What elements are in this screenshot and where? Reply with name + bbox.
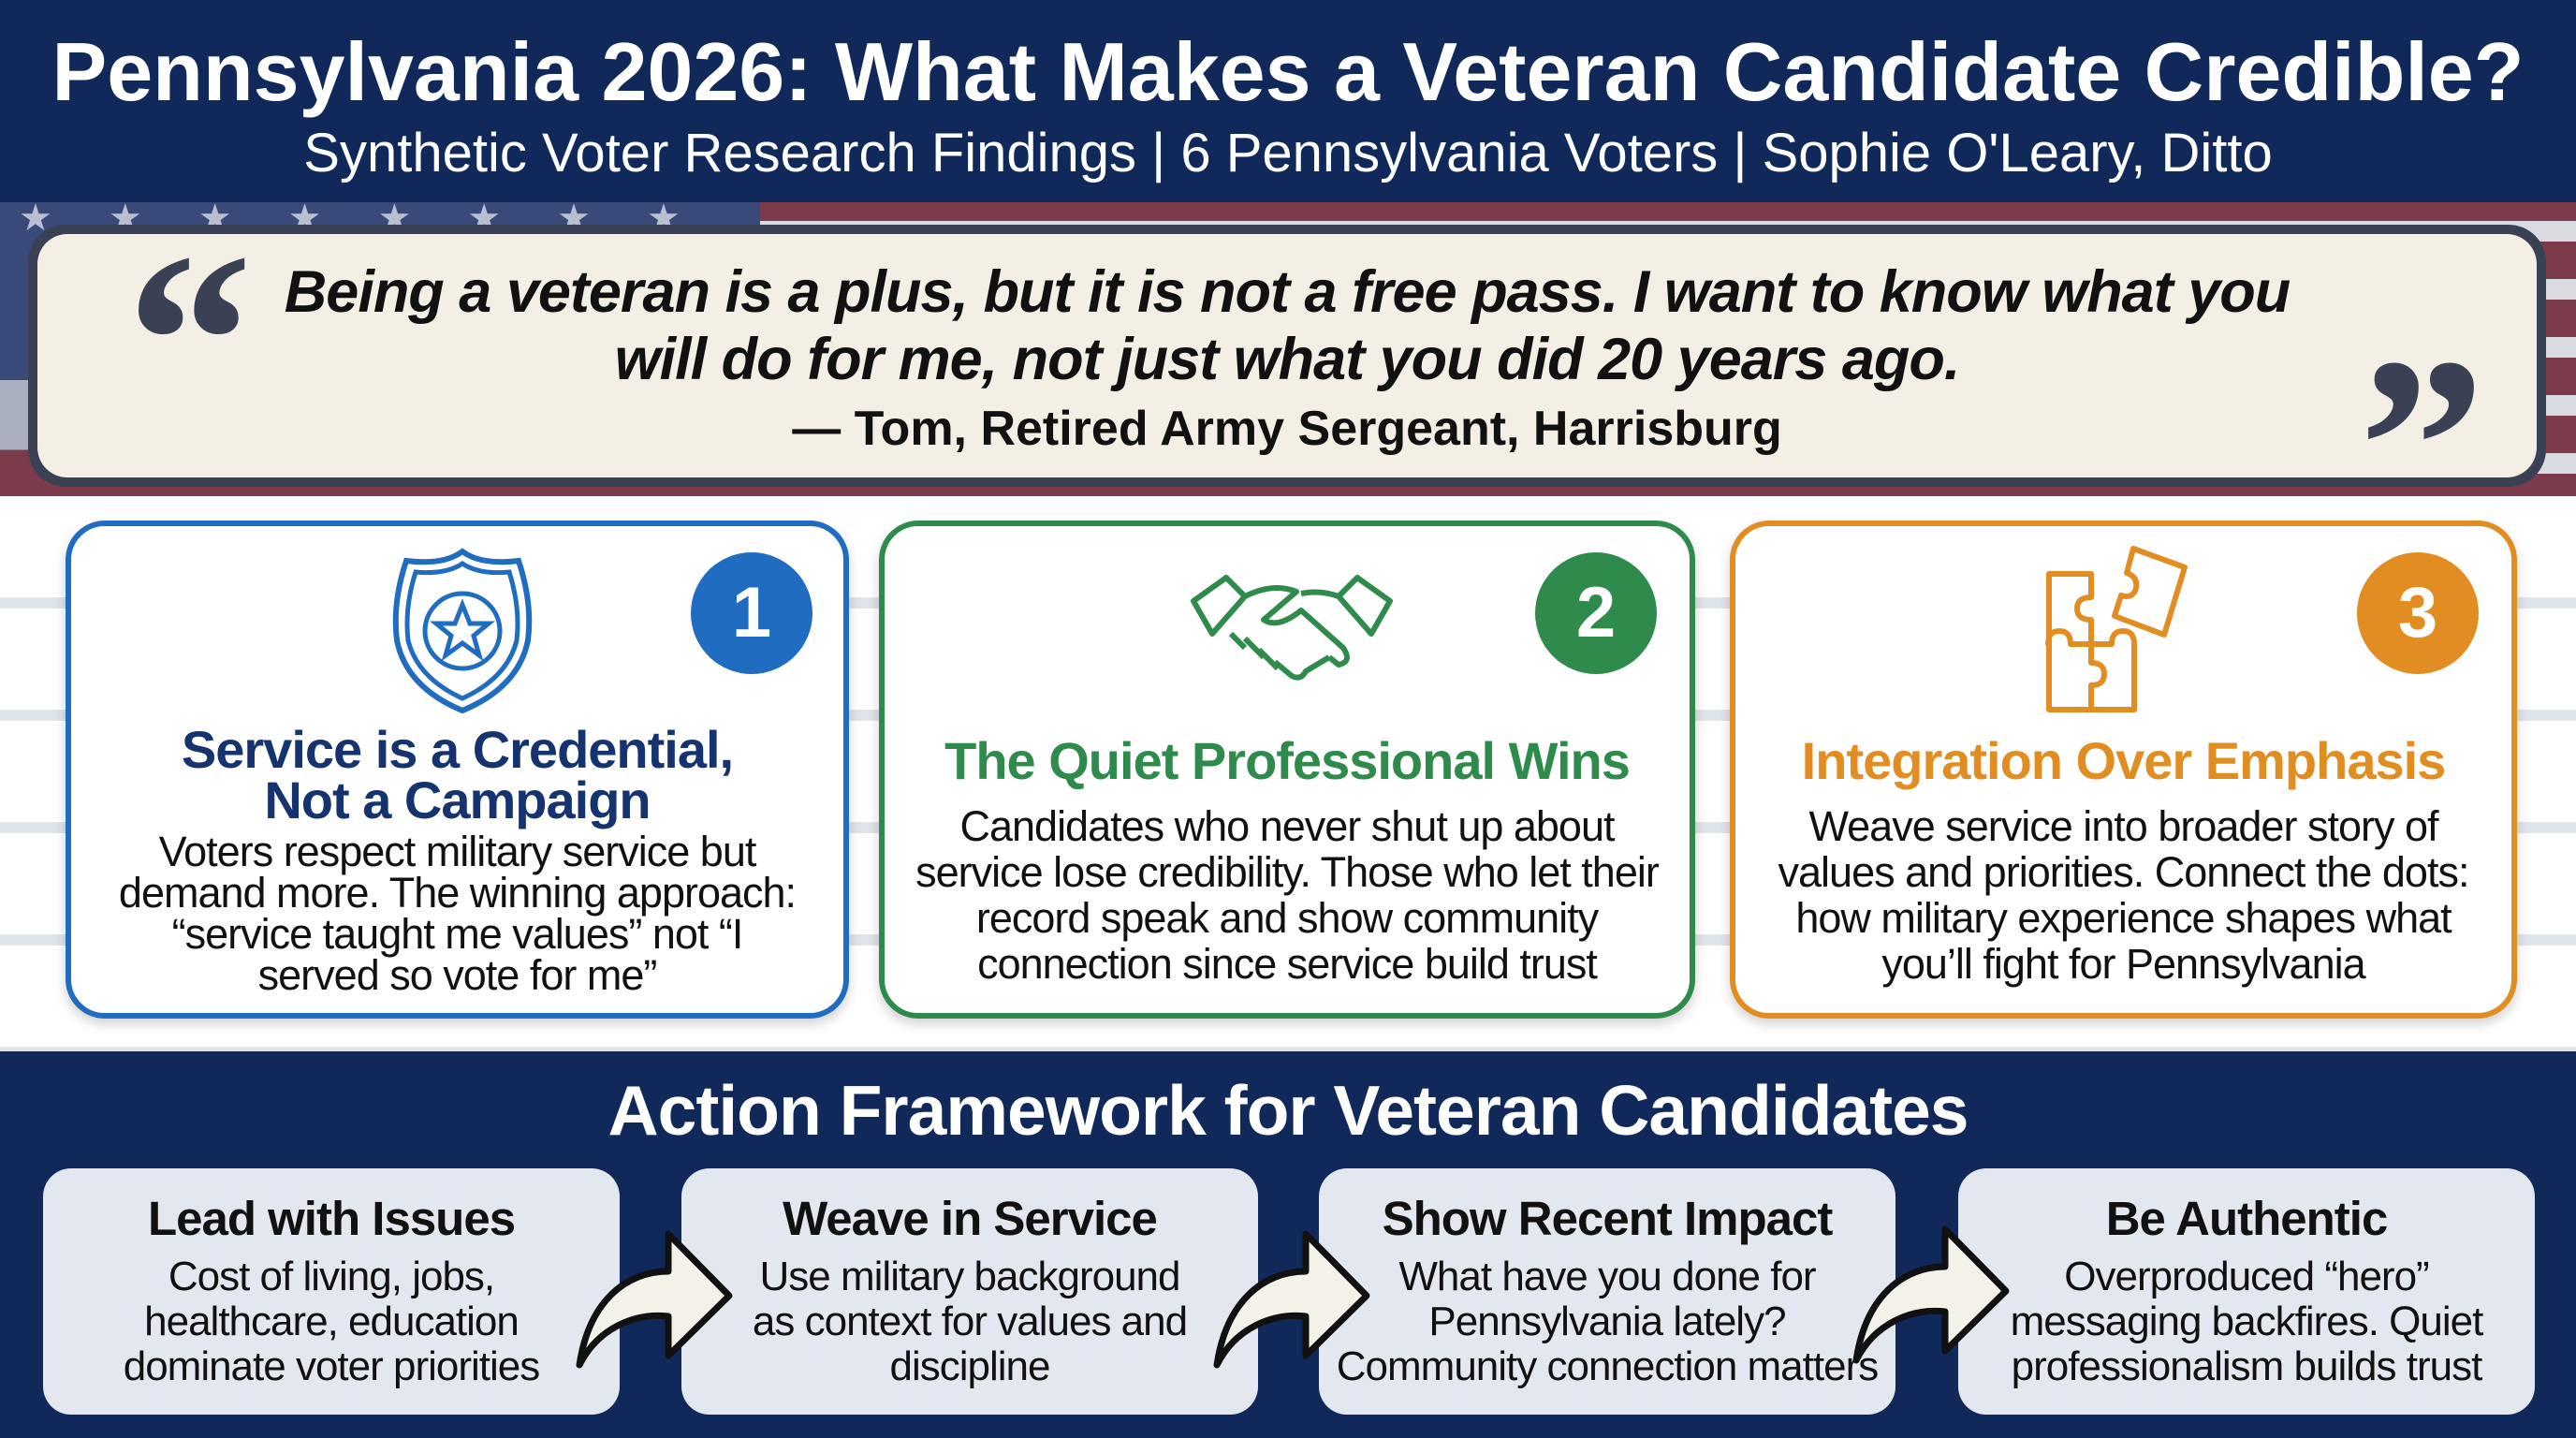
step 1 [43, 1168, 620, 1415]
step 4 [1958, 1168, 2535, 1415]
step 1: dominate voter priorities [124, 1343, 539, 1389]
card body 2: Candidates who never shut up about [959, 802, 1614, 850]
number badge 2 [1535, 552, 1657, 674]
step 1: Cost of living, jobs, [168, 1254, 494, 1299]
step 4: Overproduced “hero” [2064, 1254, 2429, 1299]
quote box [28, 225, 2546, 487]
header [0, 0, 2576, 202]
card title 1: Not a Campaign [264, 770, 651, 829]
quote text: will do for me, not just what you did 20 years ago. [615, 327, 1959, 392]
icon: handshake [1191, 575, 1393, 681]
arrow 3 [1853, 1226, 2009, 1363]
step 3: Show Recent Impact [1383, 1192, 1832, 1245]
card title 3: Integration Over Emphasis [1802, 731, 2445, 790]
card title 1: Service is a Credential, [182, 720, 733, 779]
card body 2: service lose credibility. Those who let their [915, 848, 1659, 896]
number badge 2: 2 [1576, 573, 1616, 653]
card body 2: record speak and show community [976, 894, 1598, 942]
icon: close quote: ” [2359, 306, 2485, 586]
flag band background [0, 202, 2576, 496]
card body 1: “service taught me values” not “I [172, 910, 742, 958]
card body 3: how military experience shapes what [1795, 894, 2452, 942]
step 2: Weave in Service [783, 1192, 1157, 1245]
card 1 [66, 521, 849, 1019]
step 2: Use military background [760, 1254, 1179, 1299]
step 3: Community connection matters [1337, 1343, 1878, 1389]
card body 1: served so vote for me” [258, 951, 656, 999]
card body 2: connection since service build trust [977, 940, 1597, 988]
card body 1: demand more. The winning approach: [119, 869, 796, 917]
icon: open quote: “ [126, 201, 253, 481]
card body 3: you’ll fight for Pennsylvania [1881, 940, 2365, 988]
title: Pennsylvania 2026: What Makes a Veteran Candidate Credible? [52, 25, 2524, 118]
card 2 [879, 521, 1695, 1019]
arrow 1 [577, 1230, 732, 1369]
step 4: professionalism builds trust [2012, 1343, 2481, 1389]
card body 1 [119, 828, 796, 999]
step 1: healthcare, education [144, 1299, 519, 1344]
card body 3 [1778, 802, 2468, 988]
icon: puzzle [2045, 546, 2188, 712]
subtitle: Synthetic Voter Research Findings | 6 Pennsylvania Voters | Sophie O'Leary, Ditto [303, 123, 2273, 183]
number badge 3 [2357, 552, 2479, 674]
step 3: Pennsylvania lately? [1428, 1299, 1786, 1344]
number badge 3: 3 [2398, 573, 2437, 653]
card title 2: The Quiet Professional Wins [944, 731, 1630, 790]
card body 1: Voters respect military service but [159, 828, 755, 875]
action framework section [0, 1051, 2576, 1438]
number badge 1: 1 [732, 573, 771, 653]
attribution: — Tom, Retired Army Sergeant, Harrisburg [792, 402, 1782, 456]
card body 3: values and priorities. Connect the dots: [1778, 848, 2468, 896]
step 4: messaging backfires. Quiet [2011, 1299, 2482, 1344]
number badge 1 [691, 552, 812, 674]
step 2: discipline [889, 1343, 1049, 1389]
card body 2 [915, 802, 1659, 988]
section heading: Action Framework for Veteran Candidates [607, 1071, 1969, 1150]
quote text: Being a veteran is a plus, but it is not a free pass. I want to know what you [285, 259, 2290, 325]
step 2 [681, 1168, 1258, 1415]
arrow 2 [1213, 1230, 1370, 1369]
step 3 [1319, 1168, 1895, 1415]
card 3 [1730, 521, 2517, 1019]
step 2: as context for values and [753, 1299, 1187, 1344]
card body 3: Weave service into broader story of [1808, 802, 2437, 850]
step 1: Lead with Issues [148, 1192, 515, 1245]
card title 1 [182, 720, 733, 829]
icon: badge [393, 548, 532, 713]
quote text [285, 259, 2290, 392]
step 3: What have you done for [1398, 1254, 1816, 1299]
background lines [0, 496, 2576, 1051]
flag band background: ★★★★★★★★ [19, 198, 737, 239]
step 4: Be Authentic [2106, 1192, 2387, 1245]
